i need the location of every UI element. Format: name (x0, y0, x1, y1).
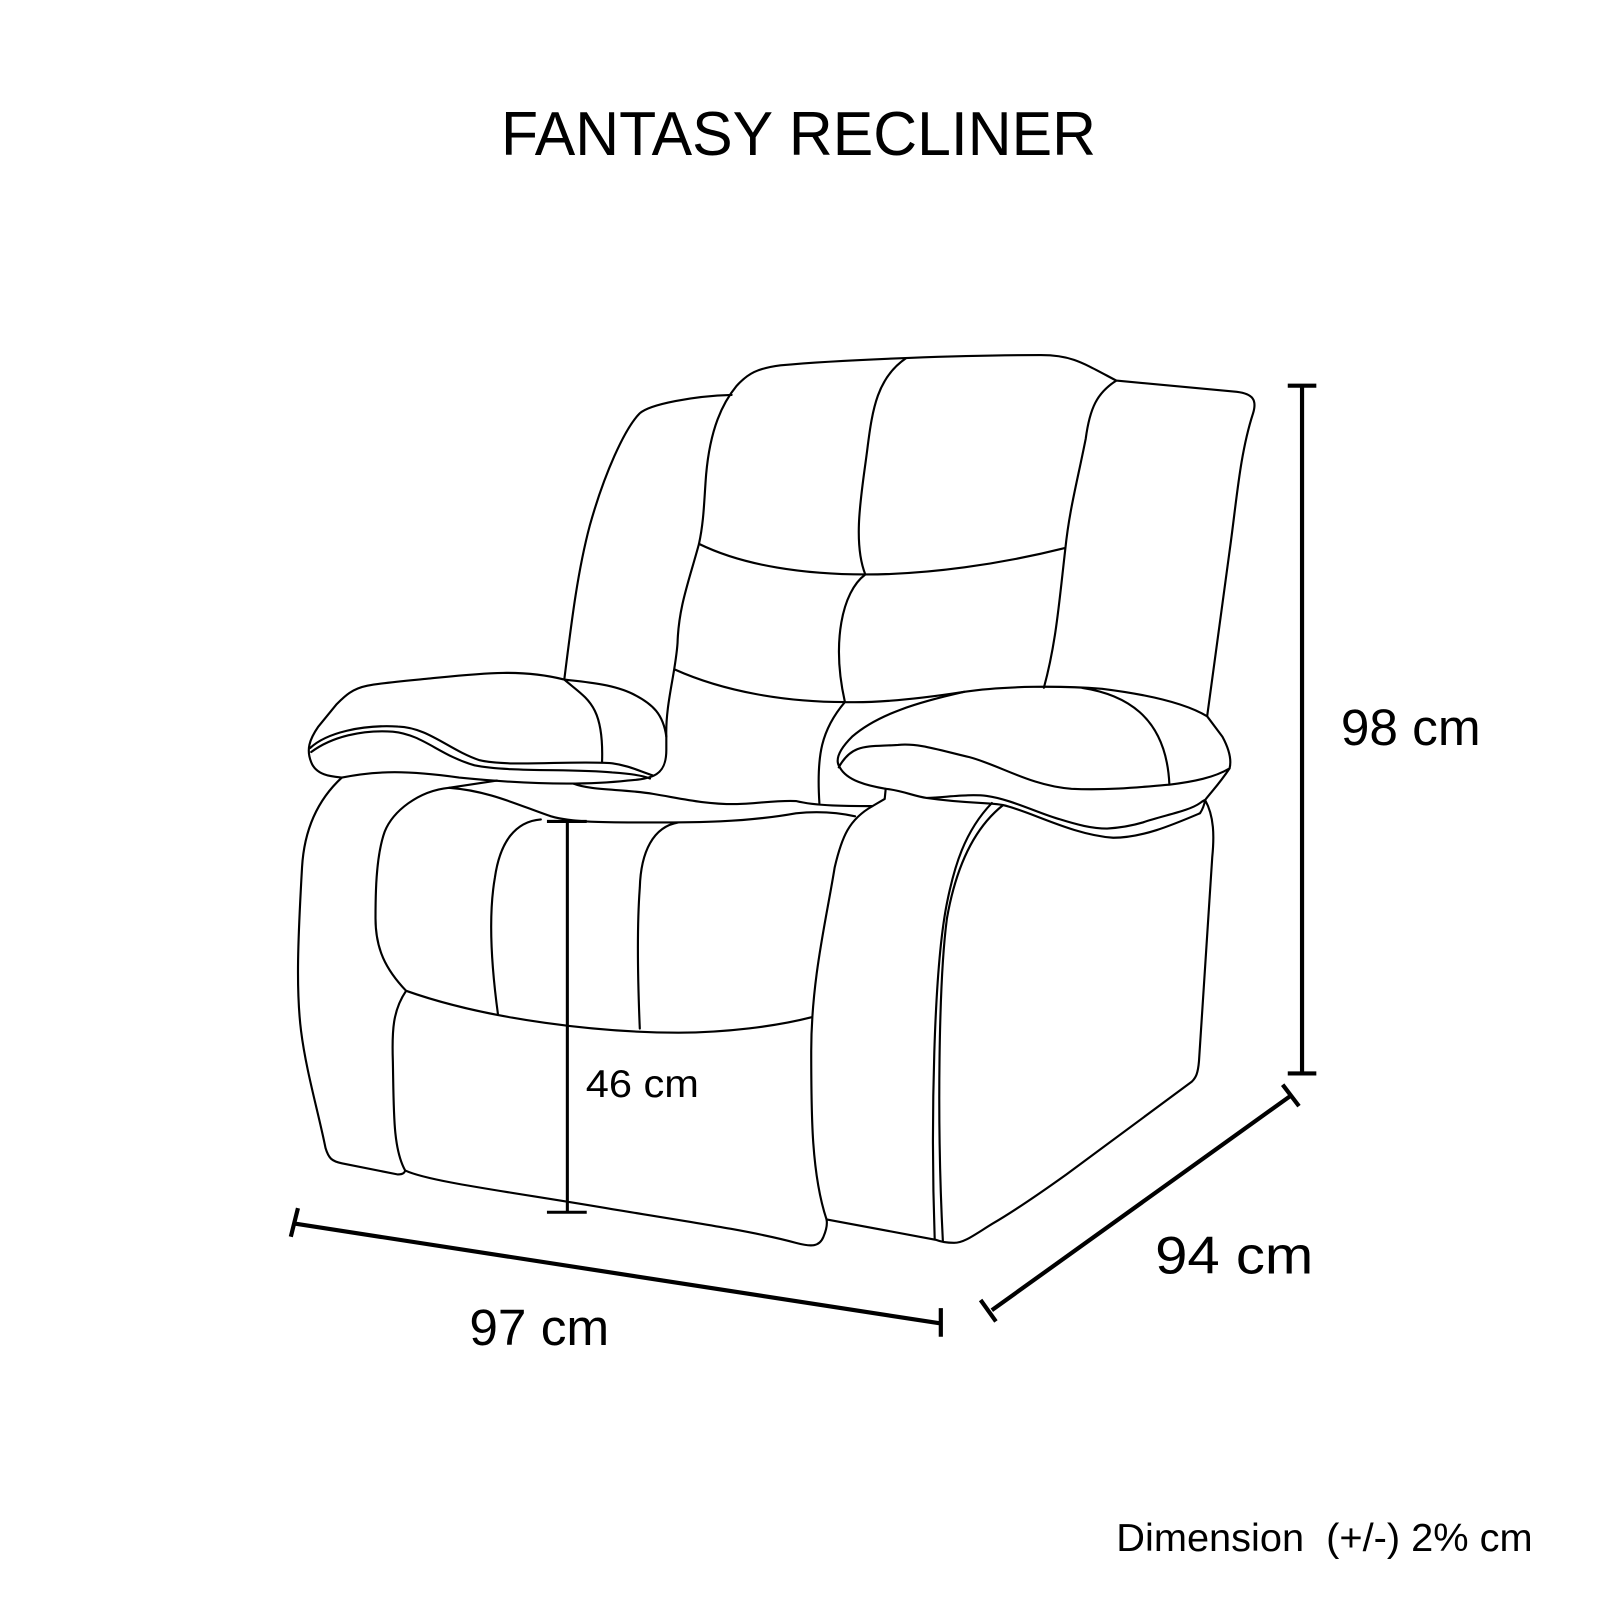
front panel and footrest (393, 991, 827, 1245)
dimension: width 97 cm (291, 1208, 941, 1356)
left armrest (309, 673, 666, 784)
dimension: depth 94 cm (981, 1085, 1313, 1321)
dimension: width 97 cm: 97 cm (469, 1299, 609, 1356)
seat cushion (376, 781, 872, 1033)
dimension: height 98 cm (1288, 386, 1481, 1073)
backrest: seams (666, 358, 1116, 803)
title: FANTASY RECLINER (501, 100, 1096, 169)
recliner line drawing (298, 355, 1255, 1245)
left arm front (298, 778, 405, 1174)
dimension: seat height 46 cm: 46 cm (586, 1063, 699, 1106)
side panel double seam (933, 803, 1003, 1241)
backrest: headrest and right wing (699, 355, 1255, 716)
right armrest (838, 687, 1230, 838)
right arm front (811, 789, 886, 1219)
dimension: height 98 cm: 98 cm (1341, 699, 1481, 756)
dimension: seat height 46 cm (547, 821, 699, 1212)
side panel (827, 800, 1213, 1243)
dimension tolerance note: Dimension (+/-) 2% cm (1116, 1517, 1533, 1560)
dimension: depth 94 cm: 94 cm (1155, 1226, 1313, 1285)
backrest: left wing (564, 395, 732, 680)
